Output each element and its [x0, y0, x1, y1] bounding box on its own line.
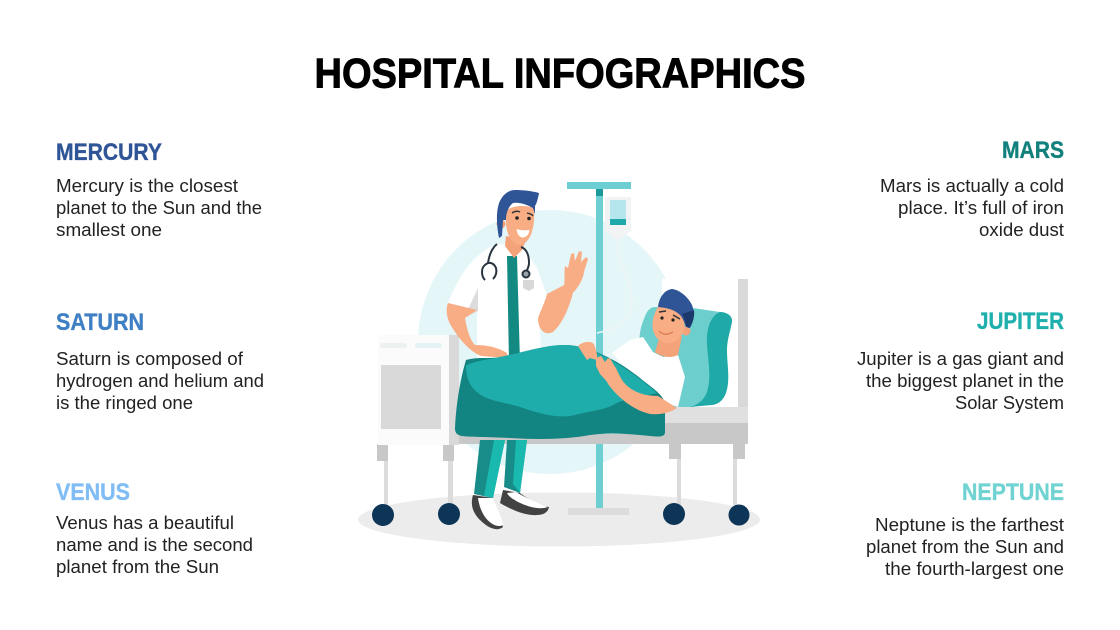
heading: neptune: NEPTUNE	[962, 479, 1064, 506]
text block: mercury	[56, 176, 262, 240]
text block: mercury: planet to the Sun and the	[56, 198, 262, 218]
background circle	[418, 210, 682, 474]
icon: stethoscope	[482, 244, 530, 280]
text block: mercury: smallest one	[56, 220, 162, 240]
panel: venus	[56, 479, 253, 577]
patient face	[652, 307, 685, 343]
heading: mars: MARS	[1002, 137, 1064, 164]
patient hair	[658, 289, 694, 328]
text block: jupiter: Solar System	[955, 393, 1064, 413]
doctor coat	[448, 244, 547, 365]
patient upper hand	[578, 342, 597, 360]
text block: mars	[880, 176, 1064, 240]
headboard backing	[662, 279, 738, 409]
text block: venus: Venus has a beautiful	[56, 513, 234, 533]
panel: mercury	[56, 139, 262, 240]
doctor hand	[564, 251, 588, 292]
floor shadow	[358, 492, 760, 546]
text block: mars: place. It’s full of iron	[898, 198, 1064, 218]
text block: saturn: hydrogen and helium and	[56, 371, 264, 391]
doctor left arm	[447, 303, 508, 358]
text block: mars: Mars is actually a cold	[880, 176, 1064, 196]
doctor hair	[497, 190, 539, 238]
patient ear	[682, 326, 690, 336]
text block: saturn: is the ringed one	[56, 393, 193, 413]
doctor front foot	[472, 495, 503, 529]
text block: jupiter: Jupiter is a gas giant and	[857, 349, 1064, 369]
patient neck	[655, 335, 682, 357]
heading: saturn: SATURN	[56, 309, 144, 336]
text block: mars: oxide dust	[979, 220, 1064, 240]
text block: neptune: Neptune is the farthest	[875, 515, 1064, 535]
doctor face	[506, 206, 534, 245]
figure: patient	[612, 289, 694, 407]
doctor back foot	[500, 490, 549, 515]
patient face details	[659, 311, 680, 334]
title: HOSPITAL INFOGRAPHICS	[314, 50, 806, 96]
panel: mars	[880, 137, 1064, 240]
panel: saturn	[56, 309, 264, 413]
doctor right arm	[538, 284, 574, 333]
text block: neptune	[866, 515, 1064, 579]
doctor legs	[474, 440, 505, 498]
text block: saturn: Saturn is composed of	[56, 349, 244, 369]
icon: blanket	[455, 345, 665, 439]
text block: jupiter: the biggest planet in the	[866, 371, 1064, 391]
heading: mercury: MERCURY	[56, 139, 162, 166]
panel: neptune	[866, 479, 1064, 579]
doctor neck	[505, 236, 526, 258]
text block: mercury: Mercury is the closest	[56, 176, 238, 196]
heading: jupiter: JUPITER	[977, 308, 1064, 335]
patient lower hand	[596, 356, 621, 385]
text block: saturn	[56, 349, 264, 413]
text block: venus: name and is the second	[56, 535, 253, 555]
patient shirt	[612, 337, 685, 407]
doctor face details	[512, 211, 533, 238]
icon: iv stand	[567, 182, 632, 515]
text block: venus: planet from the Sun	[56, 557, 219, 577]
text block: neptune: the fourth-largest one	[885, 559, 1064, 579]
coat pocket	[523, 280, 534, 291]
illustration: hospital scene	[358, 182, 760, 546]
icon: bed frame	[372, 279, 750, 526]
heading: venus: VENUS	[56, 479, 130, 506]
text block: neptune: planet from the Sun and	[866, 537, 1064, 557]
text block: venus	[56, 513, 253, 577]
icon: pillow	[639, 307, 732, 407]
patient arm on blanket	[578, 342, 677, 414]
text block: jupiter	[857, 349, 1064, 413]
figure: doctor	[447, 190, 588, 529]
panel: jupiter	[857, 308, 1064, 413]
doctor ear	[496, 220, 506, 228]
